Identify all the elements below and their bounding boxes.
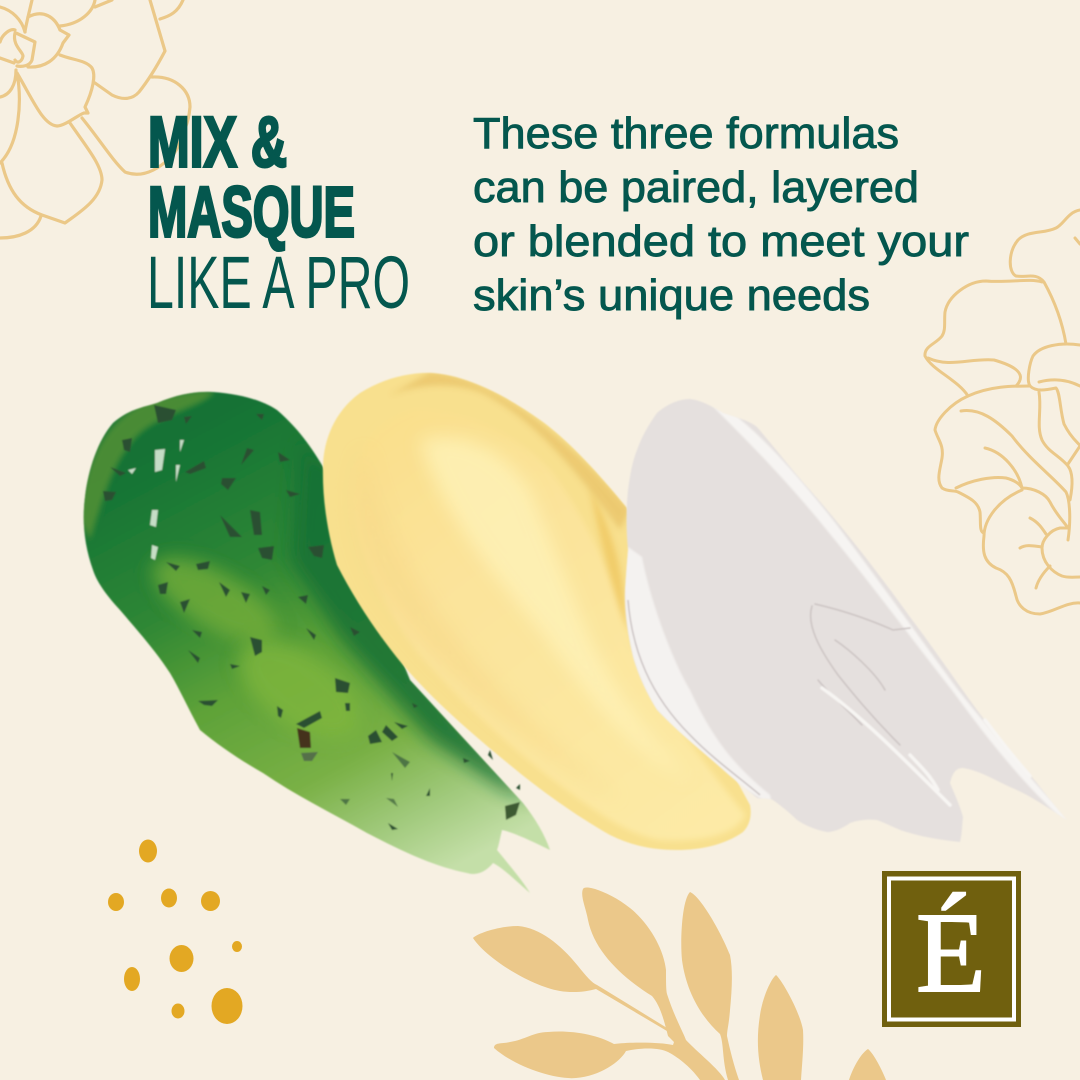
yellow golden right sliver: [590, 496, 626, 624]
description line 2: can be paired, layered: [473, 163, 919, 212]
decoration: right flower outline: [925, 210, 1080, 614]
description text block: [473, 109, 969, 320]
decoration: top-left flower outline: [0, 0, 190, 238]
title: Mix and Masque Like a Pro: [147, 104, 410, 324]
green light lower: [234, 634, 354, 733]
leaf flecks: [103, 405, 520, 830]
green light centre: [146, 550, 282, 645]
lilac highlight strokes: [822, 688, 1030, 805]
yellow warm shadow band: [388, 570, 544, 743]
description line 3: or blended to meet your: [473, 217, 969, 266]
title line 1: MIX &: [148, 104, 287, 182]
title line 3: LIKE A PRO: [147, 241, 410, 324]
highlights: [128, 440, 184, 560]
yellow golden shoulder: [390, 372, 630, 530]
logo letter: É: [916, 889, 986, 1016]
swatch: lilac masque: [624, 399, 1064, 842]
lilac left crescent: [625, 547, 772, 804]
logo: square mark: [882, 871, 1021, 1027]
green rim top-left: [80, 390, 215, 540]
lilac texture folds: [811, 604, 910, 745]
decoration: leaf branch: [473, 888, 886, 1080]
lilac outer shadow: [628, 600, 760, 795]
yellow inner cream: [402, 460, 744, 842]
green dark band along yellow: [290, 440, 530, 800]
lilac top edge ridge: [712, 402, 1067, 820]
decoration: yellow dots: [108, 840, 242, 1024]
swatch: yellow masque: [310, 360, 760, 860]
description line 1: These three formulas: [473, 109, 899, 158]
swatch: green masque: [70, 380, 560, 900]
title line 2: MASQUE: [148, 174, 355, 252]
yellow highlight: [419, 432, 658, 754]
description line 4: skin’s unique needs: [473, 271, 870, 320]
